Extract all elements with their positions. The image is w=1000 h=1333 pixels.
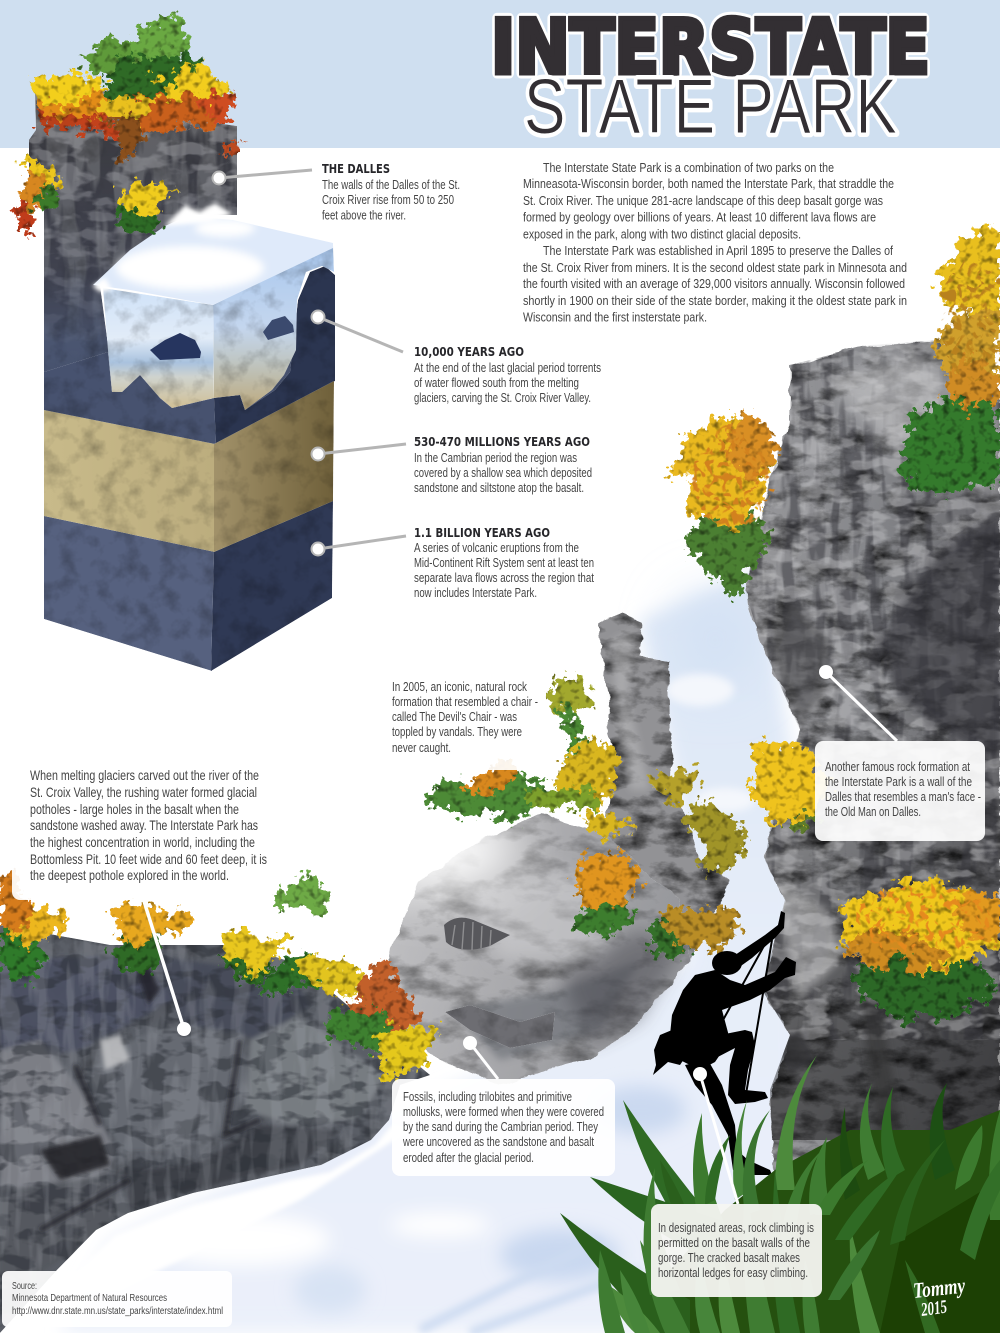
callout: 10,000 years ago: At the end of the last glacial period torrents [414,360,601,375]
intro text block: The Interstate Park was established in April 1895 to preserve the Dalles of [543,243,893,258]
callout: Devil's Chair: In 2005, an iconic, natural rock [392,679,527,694]
block: rock wall shading [29,90,237,342]
block: lower basalt right face [211,501,333,671]
callout: 530-470 million years ago: covered by a shallow sea which deposited [414,465,592,480]
callout: glacial potholes: sandstone washed away. The Interstate Park has [30,817,258,833]
foliage: lower left clusters [0,878,437,1074]
callout: fossils: were uncovered as the sandstone and basalt [402,1134,594,1149]
callout: the Dalles: THE DALLES [322,162,390,176]
callout: Devil's Chair: never caught. [392,740,451,755]
callout: the Dalles: Croix River rise from 50 to 250 [322,192,454,207]
artist signature [912,1273,966,1321]
trilobite fossil [444,918,510,950]
intro text block: Minneasota-Wisconsin border, both named the Interstate Park, that straddle the [523,176,894,191]
callout: rock climbing: permitted on the basalt walls of the [658,1235,810,1250]
callout: rock climbing: gorge. The cracked basalt makes [658,1250,800,1265]
foliage: central clusters [418,669,746,958]
title: STATE PARK [524,62,897,150]
callout: Devil's Chair: toppled by vandals. They were [392,724,522,739]
block: ice spray [92,203,232,292]
top canopy foliage [10,20,235,229]
callout: Devil's Chair: formation that resembled a chair - [392,694,538,709]
callout: 1.1 billion years ago: A series of volcanic eruptions from the [414,540,579,555]
callout: Devil's Chair [378,639,592,770]
central rock pillar: the Devil's Chair site [598,614,730,960]
source box: Source: [12,1281,37,1292]
climber silhouette [653,911,796,1175]
callout: the Dalles: The walls of the Dalles of the St. [322,177,460,192]
intro text block: formed by geology over billions of years. At least 10 different lava flows are [523,210,876,224]
callout: fossils: by the sand during the Cambrian period. They [403,1119,598,1134]
callout: rock climbing: horizontal ledges for easy climbing. [658,1265,808,1280]
right cliff: the Old Man on the Dalles [745,340,1000,1170]
geology block illustration [25,88,335,671]
callout: 10,000 years ago [312,310,601,405]
intro text block: exposed in the park, along with two distinct glacial deposits. [523,226,801,242]
callout: glacial potholes: the highest concentration in world, including the [30,834,255,850]
callout: 530-470 million years ago [312,435,592,495]
callout: 1.1 billion years ago: now includes Interstate Park. [414,585,537,600]
callout: 1.1 billion years ago [312,526,594,600]
foliage: right side clusters [679,233,1000,1017]
callout: glacial potholes: Bottomless Pit. 10 feet wide and 60 feet deep, it is [30,851,267,867]
callout: 10,000 years ago: glaciers, carving the St. Croix River Valley. [414,390,591,405]
water spray on rocks [57,1125,410,1290]
callout: the Dalles [212,162,460,222]
cliff face shading [740,340,1000,1150]
artist signature: Tommy [912,1273,966,1303]
callout: Devil's Chair: called The Devil's Chair - was [392,709,517,724]
block: sandstone left face [44,410,215,553]
intro text block: shortly in 1900 on their side of the state border, making it the oldest state park in [523,293,907,308]
title: INTERSTATE [491,3,930,91]
artist signature: 2015 [919,1296,949,1321]
grass foreground [560,1055,1000,1333]
mollusk fossils [445,1005,555,1048]
block: sandstone right face [214,381,334,553]
title: INTERSTATE [491,3,930,91]
lower left basalt rocks [0,920,430,1333]
intro text block: the fourth visited with an average of 329,000 visitors annually. Wisconsin followed [523,276,905,291]
intro text block [523,160,907,324]
intro text block: the St. Croix River from miners. It is the second oldest state park in Minnesota and [523,260,907,275]
block: basalt upper right face [212,266,335,445]
callout: rock climbing: In designated areas, rock climbing is [658,1220,814,1235]
title [491,3,930,150]
callout: Old Man on Dalles: the Old Man on Dalles. [825,804,921,819]
intro text block: The Interstate State Park is a combination of two parks on the [543,160,834,175]
callout: Old Man on Dalles [815,665,985,841]
callout: the Dalles: feet above the river. [322,208,406,222]
block: basalt upper front band [44,352,216,445]
callout: glacial potholes [12,755,275,1036]
source box [2,1271,232,1327]
callout: fossils: eroded after the glacial period. [403,1150,534,1165]
callout: 530-470 million years ago: 530-470 MILLIONS YEARS AGO [414,435,590,449]
header band [0,0,1000,148]
callout: 530-470 million years ago: In the Cambrian period the region was [414,450,577,465]
block: ice right face [213,245,334,410]
central rock outcrop with trilobite fossil [360,808,690,1085]
callout: 1.1 billion years ago: Mid-Continent Rift System sent at least ten [414,555,594,570]
callout: glacial potholes: potholes - large holes in the basalt when the [30,801,239,817]
intro text block: Wisconsin and the first insterstate park. [523,310,707,324]
callout: fossils: mollusks, were formed when they were covered [403,1104,604,1119]
callout: glacial potholes: St. Croix Valley, the rushing water formed glacial [30,784,257,800]
callout: 10,000 years ago: 10,000 YEARS AGO [414,345,524,359]
callout: glacial potholes: When melting glaciers carved out the river of the [30,767,259,783]
callout: glacial potholes: the deepest pothole explored in the world. [30,867,229,883]
river scene background [60,570,800,1333]
block: rocks under ice [150,333,201,360]
source box: Minnesota Department of Natural Resources [12,1293,167,1304]
callout: rock climbing [651,1067,822,1297]
block: lower basalt left face [44,516,215,671]
callout: 1.1 billion years ago: 1.1 BILLION YEARS AGO [414,526,550,540]
intro text block: St. Croix River. The unique 281-acre landscape of this deep basalt gorge was [523,193,883,208]
block: ice top face [93,216,333,305]
callout: 530-470 million years ago: sandstone and siltstone atop the basalt. [414,480,584,495]
callout: 10,000 years ago: of water flowed south from the melting [414,375,579,390]
source box: http://www.dnr.state.mn.us/state_parks/interstate/index.html [12,1306,223,1317]
title: STATE PARK [524,62,897,150]
block: upper rock wall [29,88,334,444]
callout: 1.1 billion years ago: separate lava flows across the region that [414,570,594,585]
callout: fossils [392,1036,615,1176]
callout: fossils: Fossils, including trilobites and primitive [403,1089,572,1104]
block: ice left face [103,288,214,408]
